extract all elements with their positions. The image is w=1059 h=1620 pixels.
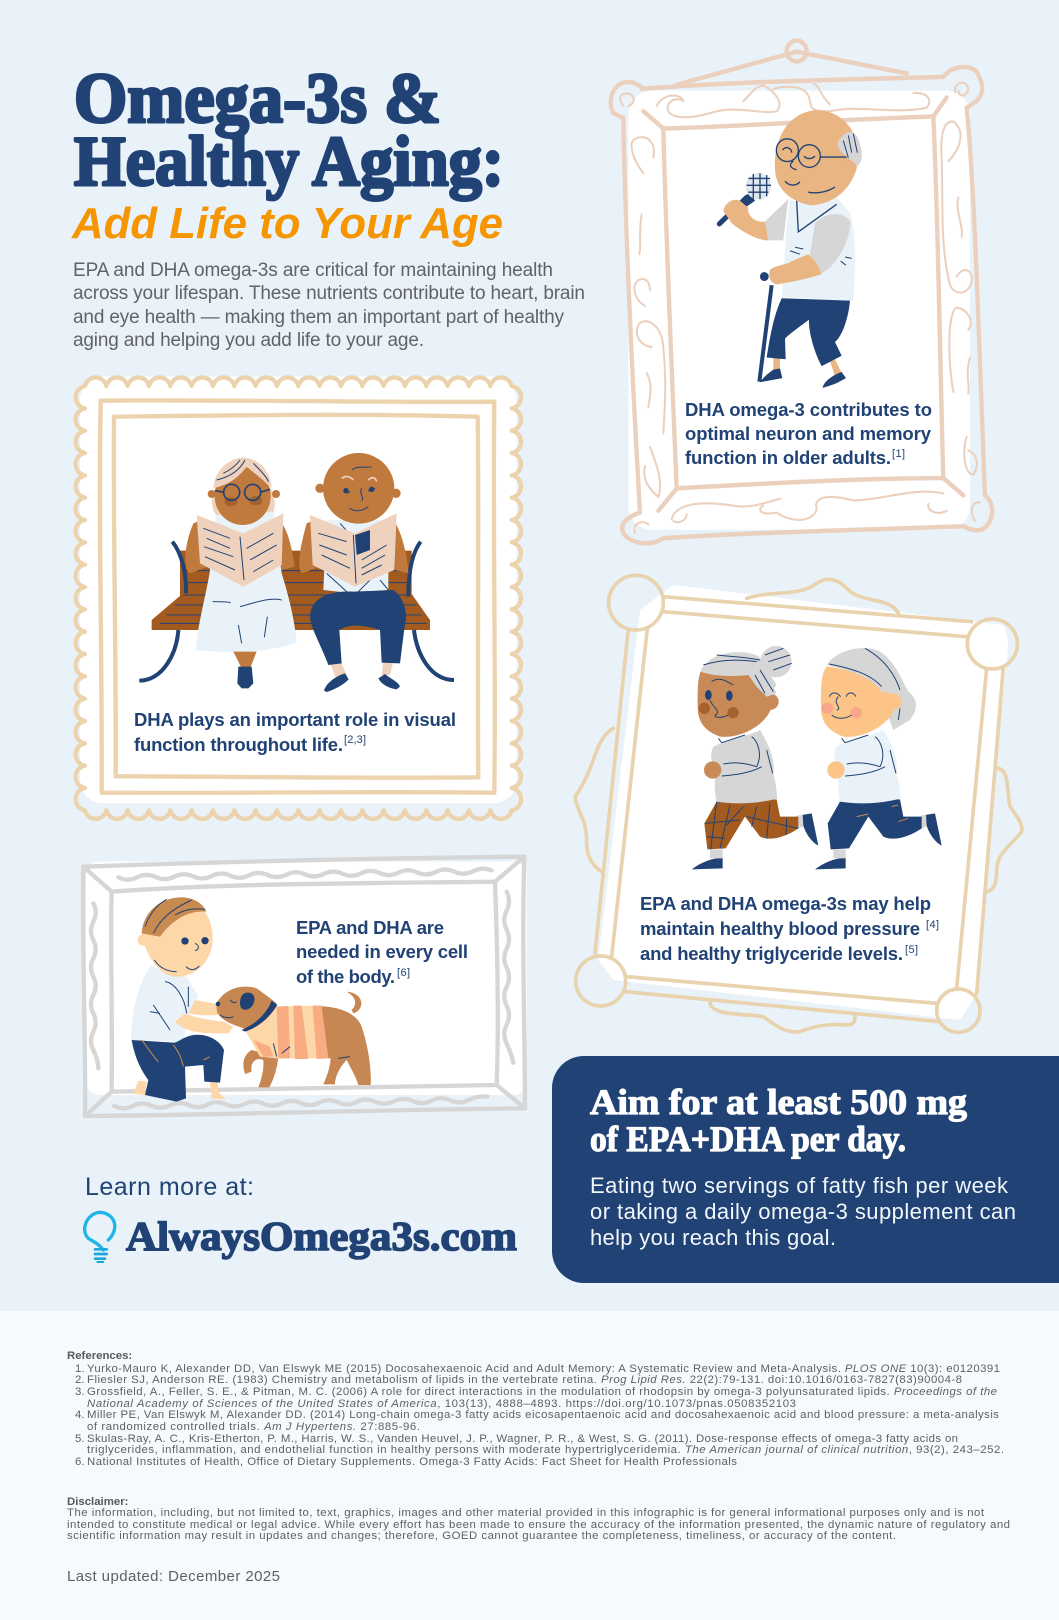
learn more block [85,1173,517,1262]
references: triglycerides, inflammation, and endothelial function in healthy persons with moderate hypertriglyceridemia. The American journal of clinical nutrition, 93(2), 243–252. [87,1444,1004,1456]
shirt and sleeves [765,196,855,301]
callout heading: of EPA+DHA per day. [590,1119,906,1159]
caption [640,893,939,964]
references: 4. [75,1409,84,1421]
caption: [6] [397,967,410,979]
caption: and healthy triglyceride levels. [640,943,903,964]
caption: function in older adults. [685,447,891,468]
last updated: Last updated: December 2025 [67,1568,280,1585]
disclaimer [67,1496,1010,1542]
frame: ornate pink [611,41,992,543]
title: Healthy Aging: [74,123,504,201]
disclaimer: scientific information may result in updates and changes; therefore, GOED cannot guarantee the completeness, timeliness, or accuracy of the content. [67,1530,896,1542]
references: National Academy of Sciences of the United States of America, 103(13), 4888–4893. https://doi.org/10.1073/pnas.0508352103 [87,1398,796,1410]
references: 1. [75,1363,84,1375]
learn more label: Learn more at: [85,1173,254,1201]
references: Fliesler SJ, Anderson RE. (1983) Chemistry and metabolism of lipids in the vertebrate retina. Prog Lipid Res. 22(2):79-131. doi:10.1016/0163-7827(83)90004-8 [87,1374,962,1386]
caption [134,709,456,755]
caption: [1] [892,448,905,460]
caption: EPA and DHA omega-3s may help [640,893,931,914]
caption: optimal neuron and memory [685,423,932,444]
caption [296,917,468,987]
references: References: [67,1350,132,1362]
illustration: two women jogging [692,646,942,869]
disclaimer: Disclaimer: [67,1496,128,1508]
references: Miller PE, Van Elswyk M, Alexander DD. (2014) Long-chain omega-3 fatty acids eicosapentaenoic acid and docosahexaenoic acid and blood pressure: a meta-analysis [87,1409,999,1421]
dog [216,987,371,1087]
references: 6. [75,1456,84,1468]
references: of randomized controlled trials. Am J Hypertens. 27:885-96. [87,1421,420,1433]
intro text block: across your lifespan. These nutrients contribute to heart, brain [73,283,585,304]
caption: of the body. [296,966,395,987]
woman right [815,648,942,869]
caption: DHA plays an important role in visual [134,709,456,730]
caption: [2,3] [344,734,366,746]
title [74,60,504,201]
caption: [5] [905,944,918,956]
caption [685,399,932,468]
raised arm with microphone [719,173,771,240]
lower arm and cane [759,254,822,382]
illustration: man petting dog [131,897,371,1102]
bench [139,542,454,681]
panel: neuron and memory [611,41,992,543]
panel: visual function [76,377,521,819]
legs and feet [759,358,846,388]
illustration: man singing with cane [719,110,862,388]
man [131,897,233,1102]
references: 5. [75,1433,84,1445]
head [775,110,862,205]
intro text block [73,260,585,351]
intro text block: and eye health — making them an important part of healthy [73,307,564,328]
references: National Institutes of Health, Office of Dietary Supplements. Omega-3 Fatty Acids: Fact Sheet for Health Professionals [87,1456,737,1468]
references: Yurko-Mauro K, Alexander DD, Van Elswyk ME (2015) Docosahexaenoic Acid and Adult Memory: A Systematic Review and Meta-Analysis. PLOS ONE 10(3): e0120391 [87,1363,1000,1375]
callout body: or taking a daily omega-3 supplement can [590,1199,1016,1224]
caption: [4] [926,919,939,931]
caption: function throughout life. [134,734,343,755]
caption: EPA and DHA are [296,917,444,938]
icon: light bulb [85,1212,115,1262]
callout body: help you reach this goal. [590,1225,836,1250]
frame: gray wavy [83,857,527,1116]
panel: every cell [83,857,527,1116]
frame: scalloped tan [76,377,521,819]
references [67,1350,1004,1468]
title: Omega-3s & [74,60,441,138]
woman left [692,646,818,869]
subtitle: Add Life to Your Age [71,199,503,248]
caption: needed in every cell [296,941,468,962]
intro text block: aging and helping you add life to your age. [73,330,424,351]
disclaimer: The information, including, but not limited to, text, graphics, images and other material provided in this infographic is for general informational purposes only and is not [67,1507,985,1519]
callout: daily recommendation [552,1056,1059,1283]
illustration: couple reading on a bench [139,453,454,692]
references: 3. [75,1386,84,1398]
panel: blood pressure [575,575,1022,1032]
callout heading [590,1082,967,1159]
caption: DHA omega-3 contributes to [685,399,932,420]
intro text block: EPA and DHA omega-3s are critical for maintaining health [73,260,553,281]
references: 2. [75,1374,84,1386]
callout body: Eating two servings of fatty fish per week [590,1173,1009,1198]
callout body [590,1173,1016,1250]
frame: tilted tan with round corners [575,575,1022,1032]
references: Grossfield, A., Feller, S. E., & Pitman, M. C. (2006) A role for direct interactions in the modulation of rhodopsin by omega-3 polyunsaturated lipids. Proceedings of the [87,1386,997,1398]
website: AlwaysOmega3s.com [126,1213,517,1259]
caption: maintain healthy blood pressure [640,918,920,939]
disclaimer: intended to constitute medical or legal advice. While every effort has been made to ensure the accuracy of the information presented, the dynamic nature of regulatory and [67,1519,1010,1531]
woman [185,458,297,688]
man [299,453,408,692]
callout heading: Aim for at least 500 mg [590,1082,967,1122]
references: Skulas-Ray, A. C., Kris-Etherton, P. M., Harris, W. S., Vanden Heuvel, J. P., Wagner, P. R., & West, S. G. (2011). Dose-response effects of omega-3 fatty acids on [87,1433,958,1445]
